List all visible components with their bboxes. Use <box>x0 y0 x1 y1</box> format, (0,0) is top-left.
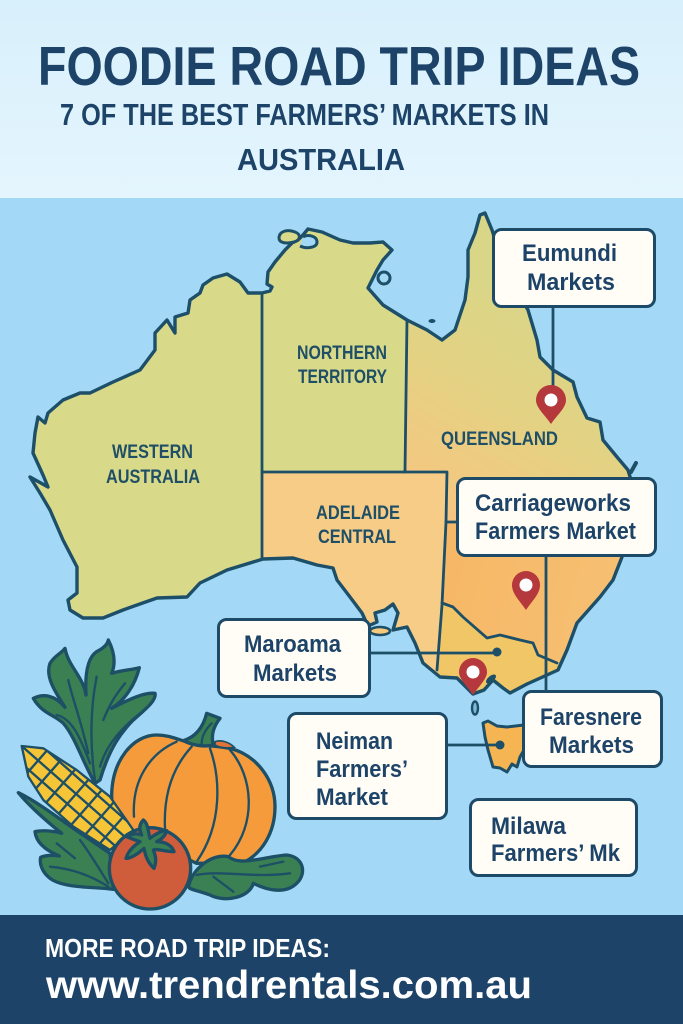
ocean background <box>0 198 683 915</box>
states fill <box>34 216 628 692</box>
region label: Queensland: QUEENSLAND <box>441 429 558 450</box>
coastline <box>30 213 634 694</box>
region label: Adelaide Central <box>316 503 400 548</box>
label: Milawa Farmers' Mk: Milawa <box>491 813 567 840</box>
state borders <box>262 293 557 692</box>
label: Carriageworks Farmers Market: Farmers Market <box>475 518 636 545</box>
spinach leaf <box>188 855 303 899</box>
region label: Western Australia: AUSTRALIA <box>106 467 200 488</box>
connector: Maroama <box>370 648 502 656</box>
map of Australia <box>28 211 638 774</box>
label: Faresnere Markets: Faresnere <box>540 704 642 731</box>
connector: Eumundi <box>552 307 554 390</box>
region label: Northern Territory: TERRITORY <box>298 367 387 388</box>
header band <box>0 0 683 198</box>
footer heading: MORE ROAD TRIP IDEAS: <box>45 933 330 963</box>
label: Neiman Farmers' Market: Market <box>316 784 388 811</box>
subtitle: 7 OF THE BEST FARMERS’ MARKETS IN <box>60 97 549 132</box>
pin: New South Wales <box>512 571 540 610</box>
islands <box>279 231 636 714</box>
footer band <box>0 915 683 1024</box>
label: Carriageworks Farmers Market <box>458 478 656 556</box>
leafy greens <box>33 640 155 783</box>
label: Maroama Markets: Maroama <box>244 631 342 658</box>
label: Neiman Farmers' Market: Farmers’ <box>316 756 408 783</box>
Tasmania <box>483 721 524 772</box>
label: Maroama Markets: Markets <box>253 660 337 687</box>
region label: Adelaide Central: ADELAIDE <box>316 503 400 524</box>
subtitle: AUSTRALIA <box>237 142 405 177</box>
label: Neiman Farmers' Market: Neiman <box>316 728 393 755</box>
region label: Northern Territory <box>297 343 387 388</box>
label: Eumundi Markets: Eumundi <box>522 240 617 267</box>
footer website: www.trendrentals.com.au <box>45 964 532 1007</box>
label: Faresnere Markets <box>524 692 662 766</box>
region label: Western Australia <box>106 442 200 488</box>
label: Maroama Markets <box>218 620 370 696</box>
label: Eumundi Markets <box>494 230 654 306</box>
label: Milawa Farmers' Mk: Farmers’ Mk <box>491 840 621 867</box>
label: Eumundi Markets: Markets <box>527 269 615 296</box>
illustration: vegetables <box>9 640 303 909</box>
tomato <box>109 820 191 909</box>
region label: Adelaide Central: CENTRAL <box>318 527 396 548</box>
pumpkin <box>112 713 275 863</box>
label: Carriageworks Farmers Market: Carriageworks <box>475 490 631 517</box>
label: Milawa Farmers' Mk <box>470 800 636 876</box>
pin: Victoria <box>459 658 487 695</box>
region label: Northern Territory: NORTHERN <box>297 343 387 364</box>
connector: Neiman <box>447 740 504 750</box>
label: Faresnere Markets: Markets <box>549 732 634 759</box>
pin: Queensland <box>536 385 566 424</box>
label: Neiman Farmers' Market <box>288 714 446 818</box>
corn husk and leaves <box>18 793 113 889</box>
region label: Western Australia: WESTERN <box>112 442 193 463</box>
corn cob <box>20 744 134 852</box>
subtitle <box>60 97 549 177</box>
